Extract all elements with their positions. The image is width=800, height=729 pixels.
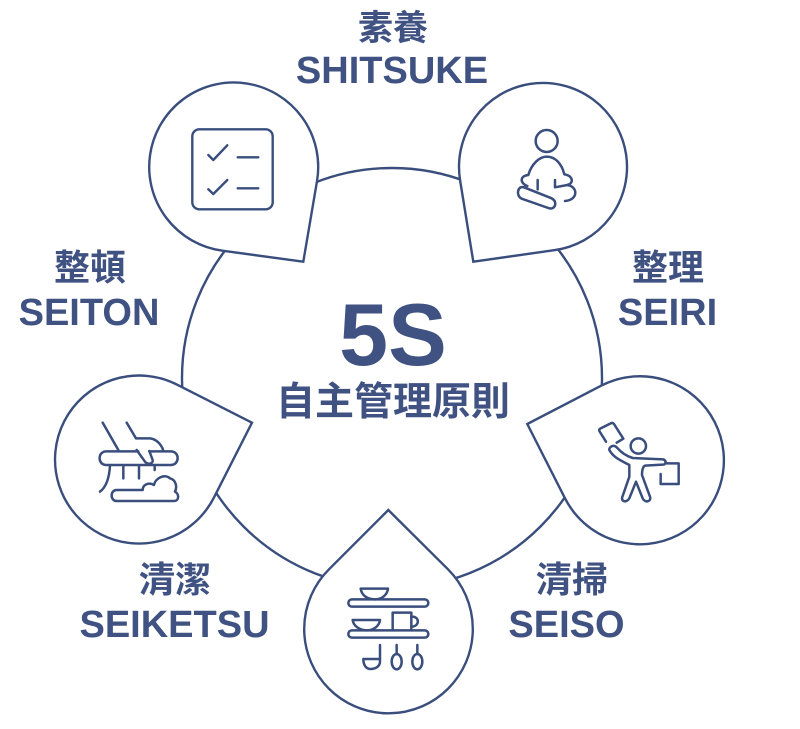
label: SEIRI xyxy=(618,247,717,334)
panel: top-left drop with checklist xyxy=(149,82,318,262)
label: SHITSUKE xyxy=(296,9,488,92)
label: SEISO: SEISO xyxy=(508,604,625,646)
label: SEIKETSU xyxy=(79,559,270,646)
panel: left drop with scrubbing hand xyxy=(55,376,252,544)
label: SEISO xyxy=(508,559,625,646)
label: SEIKETSU: 清潔 xyxy=(139,559,211,600)
label: SEISO: 清掃 xyxy=(536,559,608,600)
icon: hand wiping surface xyxy=(100,423,178,501)
label: SEITON xyxy=(19,247,159,334)
label: SEIKETSU: SEIKETSU xyxy=(79,604,270,646)
icon: meditating person xyxy=(518,130,575,208)
label: SEIRI: 整理 xyxy=(632,247,704,288)
panel: bottom drop with kitchen shelves xyxy=(304,510,473,713)
label: SHITSUKE: 素養 xyxy=(358,9,428,48)
center title xyxy=(276,285,510,424)
title: 5S: 5S xyxy=(339,285,447,384)
icon: kitchen shelves xyxy=(348,589,428,669)
subtitle: 自主管理原則 xyxy=(276,381,510,424)
label: SHITSUKE: SHITSUKE xyxy=(296,50,488,92)
panel: top-right drop with meditating person xyxy=(459,83,627,262)
central ring xyxy=(182,168,602,588)
icon: checklist xyxy=(192,129,273,209)
panel: right drop with cleaning person xyxy=(527,376,724,544)
label: SEIRI: SEIRI xyxy=(618,292,717,334)
label: SEITON: 整頓 xyxy=(54,247,126,288)
icon: person with paper and bin xyxy=(599,423,679,501)
label: SEITON: SEITON xyxy=(19,292,159,334)
